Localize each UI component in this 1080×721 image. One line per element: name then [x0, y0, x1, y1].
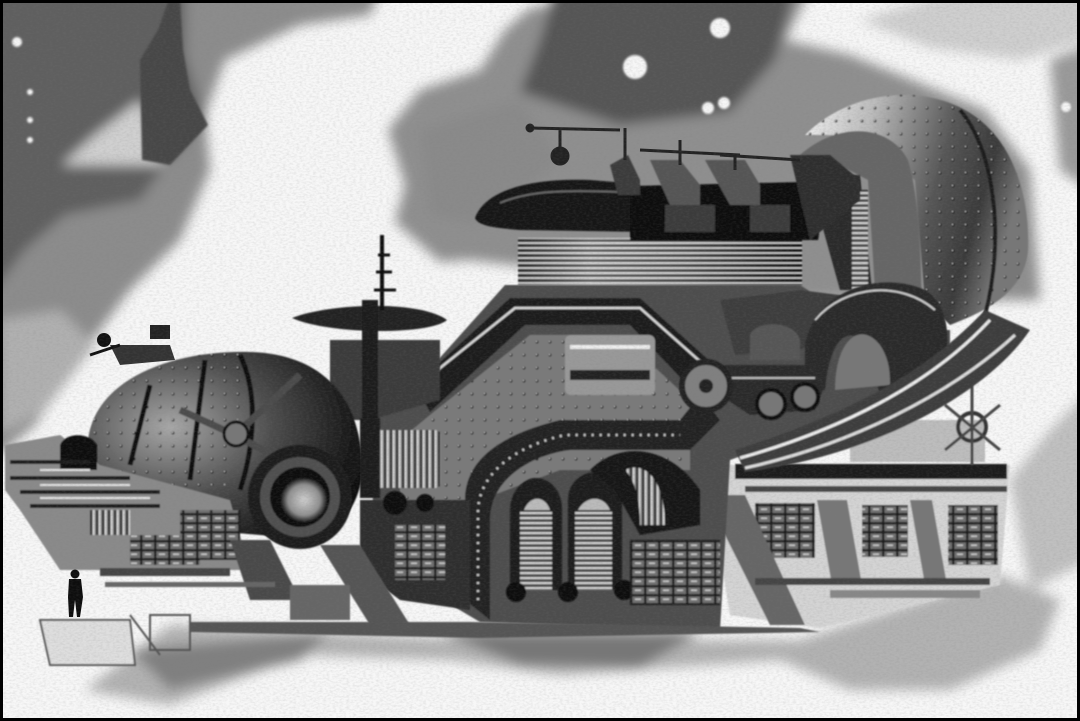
icon: large riveted rear dome	[800, 95, 1028, 325]
icon: glass capsule tanks	[506, 451, 720, 605]
clouds: upper left grey mass	[0, 0, 385, 470]
icon: white moons in the sky	[12, 18, 1071, 143]
clouds: upper right grey mass	[388, 0, 1080, 300]
icon: black domed cap with ribbed cylinder	[475, 155, 860, 285]
machine: left nose and gearing	[5, 435, 410, 625]
machine: central body	[370, 285, 950, 630]
icon: small boiler engine with wheels	[682, 324, 825, 418]
machine: right lower deck	[705, 464, 1010, 628]
icon: roof levers and hanging bulb	[527, 125, 800, 170]
icon: standing human figure	[68, 570, 83, 617]
icon: round lens port	[248, 445, 352, 549]
icon: ribbed drum	[360, 418, 470, 610]
machine: mast saucer and tower	[292, 235, 447, 420]
clouds: lower haze	[85, 390, 1080, 705]
icon: distant tower	[140, 2, 208, 165]
machine: foreground platform	[40, 615, 820, 665]
icon: large left ribbed sphere	[88, 352, 362, 540]
icon: curved rear arch with dark opening	[805, 282, 948, 395]
icon: curved rail ramp	[735, 310, 1030, 472]
icon: roof instruments on left sphere	[90, 325, 175, 365]
